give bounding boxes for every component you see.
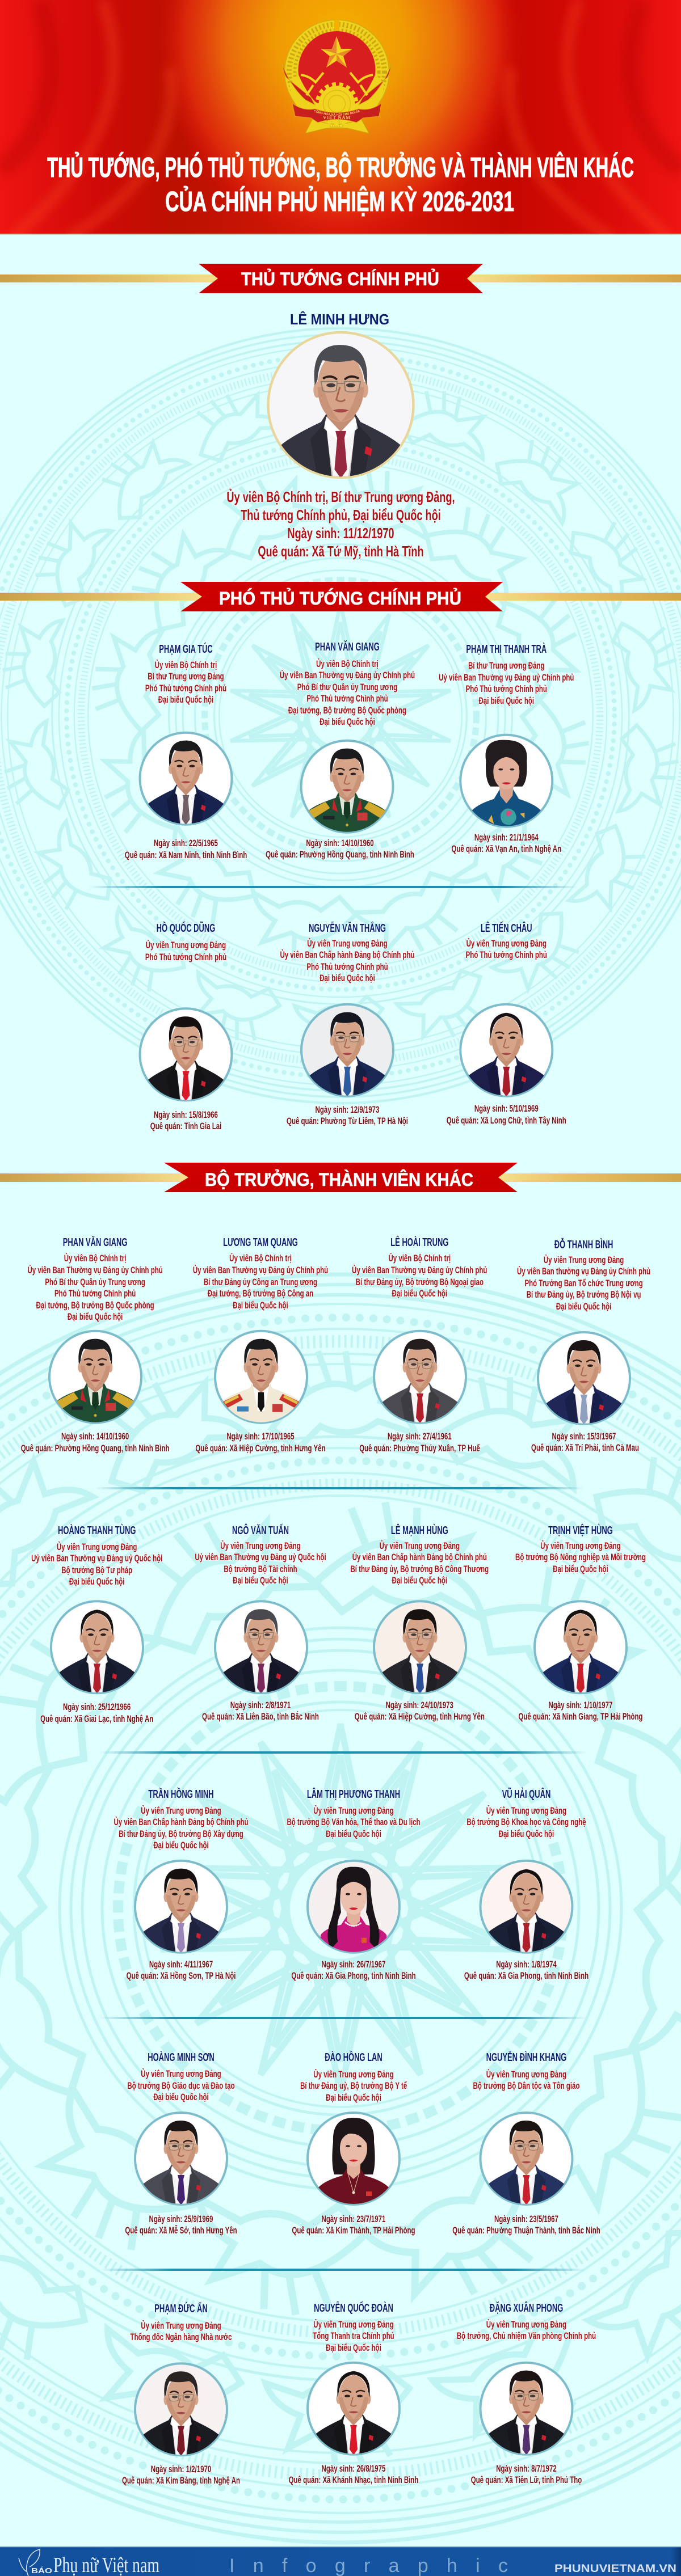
panel: Lê Mạnh Hùng	[350, 1524, 489, 1722]
role and biography: Ngày sinh: 11/12/1970	[287, 525, 394, 542]
birth date and hometown: Quê quán: Phường Thuận Thành, tỉnh Bắc Ninh	[452, 2224, 600, 2236]
roles: Bộ trưởng Bộ Dân tộc và Tôn giáo	[473, 2081, 580, 2092]
portrait	[538, 1332, 630, 1426]
birth date and hometown: Quê quán: Phường Thủy Xuân, TP Huế	[359, 1443, 480, 1454]
birth date and hometown: Ngày sinh: 17/10/1965	[226, 1431, 295, 1442]
birth date and hometown: Quê quán: Xã Mễ Sở, tỉnh Hưng Yên	[125, 2225, 237, 2236]
roles: Ủy viên Trung ương Đảng	[486, 1805, 566, 1817]
birth date and hometown: Ngày sinh: 23/5/1967	[494, 2214, 558, 2225]
roles: Đại biểu Quốc hội	[158, 695, 213, 706]
birth date and hometown	[359, 1431, 480, 1454]
roles: Đại biểu Quốc hội	[69, 1577, 124, 1587]
roles: Ủy viên Trung ương Đảng	[486, 2068, 566, 2080]
roles	[300, 2068, 407, 2104]
birth date and hometown: Ngày sinh: 2/8/1971	[230, 1700, 291, 1711]
roles: Bí thư Trung ương Đảng	[468, 661, 544, 672]
panel: Phan Văn Giang (Bộ Quốc phòng)	[21, 1236, 170, 1454]
panel: Đào Hồng Lan	[292, 2051, 415, 2236]
birth date and hometown: Quê quán: Phường Hồng Quang, tỉnh Ninh Bình	[266, 850, 414, 860]
roles: Bí thư Đảng uỷ, Bộ trưởng Bộ Y tế	[300, 2081, 407, 2092]
roles: Ủy viên Bộ Chính trị	[316, 658, 379, 670]
roles: Ủy viên Bộ Chính trị	[229, 1252, 292, 1264]
roles	[466, 1805, 586, 1840]
birth date and hometown	[292, 2214, 415, 2236]
roles: Bộ trưởng Bộ Khoa học và Công nghệ	[466, 1817, 586, 1828]
panel: Nguyễn Quốc Đoàn	[289, 2301, 418, 2486]
roles: Phó Thủ tướng Chính phủ	[466, 950, 547, 961]
name: ĐẶNG XUÂN PHONG	[490, 2301, 563, 2315]
birth date and hometown	[464, 1960, 588, 1982]
portrait	[308, 2113, 400, 2207]
logo text: BÁO	[31, 2566, 52, 2575]
roles: Đại biểu Quốc hội	[392, 1289, 447, 1299]
roles: Đại tướng, Bộ trưởng Bộ Quốc phòng	[288, 706, 406, 716]
roles: Bí thư Đảng ủy, Bộ trưởng Bộ Nội vụ	[527, 1290, 641, 1300]
roles: Đại biểu Quốc hội	[499, 1829, 554, 1840]
birth date and hometown	[518, 1700, 643, 1722]
roles	[114, 1805, 249, 1851]
birth date and hometown: Ngày sinh: 27/4/1961	[388, 1431, 452, 1442]
birth date and hometown: Ngày sinh: 14/10/1960	[306, 838, 374, 849]
roles: Đại biểu Quốc hội	[553, 1564, 608, 1575]
roles: Bộ trưởng Bộ Tài chính	[224, 1564, 297, 1575]
birth date and hometown: Quê quán: Phường Từ Liêm, TP Hà Nội	[287, 1116, 408, 1127]
roles: Đại biểu Quốc hội	[233, 1300, 288, 1311]
portrait	[460, 1004, 552, 1099]
birth date and hometown	[291, 1960, 416, 1982]
roles: Ủy viên Trung ương Đảng	[486, 2319, 566, 2330]
roles: Phó Thủ tướng Chính phủ	[466, 684, 547, 695]
logo text	[31, 2553, 159, 2576]
panel: Nguyễn Văn Thắng	[280, 922, 415, 1127]
roles: Đại biểu Quốc hội	[326, 2343, 381, 2354]
roles: Ủy viên Ban Thường vụ Đảng ủy Chính phủ	[352, 1264, 487, 1276]
infographic label: Infographic	[229, 2555, 508, 2576]
panel: Lê Tiến Châu	[447, 922, 566, 1126]
portrait	[480, 2363, 572, 2457]
roles	[350, 1540, 489, 1586]
roles	[439, 661, 574, 707]
roles: Ủy viên Ban thường vụ Đảng ủy Chính phủ	[517, 1265, 650, 1277]
portrait	[301, 1004, 393, 1099]
portrait	[51, 1601, 143, 1695]
name: PHẠM GIA TÚC	[159, 643, 213, 656]
title: CỦA CHÍNH PHỦ NHIỆM KỲ 2026-2031	[165, 186, 514, 217]
title	[47, 152, 634, 217]
panel: Đỗ Thanh Bình	[517, 1238, 650, 1454]
roles	[352, 1252, 487, 1299]
roles	[280, 938, 415, 984]
roles	[131, 2320, 232, 2343]
roles: Ủy viên Trung ương Đảng	[313, 2319, 394, 2330]
roles: Đại biểu Quốc hội	[479, 696, 534, 707]
roles: Bí thư Đảng ủy, Bộ trưởng Bộ Xây dựng	[119, 1829, 243, 1840]
name: LƯƠNG TAM QUANG	[223, 1236, 298, 1249]
panel: Trịnh Việt Hùng	[515, 1524, 646, 1722]
name: LÊ TIẾN CHÂU	[481, 922, 532, 935]
roles	[515, 1540, 646, 1575]
name: PHẠM THỊ THANH TRÀ	[466, 643, 547, 656]
roles: Đại biểu Quốc hội	[320, 973, 375, 984]
roles: Ủy viên Trung ương Đảng	[141, 2068, 221, 2080]
roles	[466, 938, 547, 961]
portrait	[374, 1601, 466, 1695]
panel: Trần Hồng Minh	[114, 1788, 249, 1982]
birth date and hometown	[122, 2464, 240, 2486]
roles	[31, 1541, 162, 1587]
roles: Ủy viên Trung ương Đảng	[466, 938, 547, 949]
panel: Phan Văn Giang	[266, 640, 415, 860]
birth date and hometown: Ngày sinh: 15/8/1966	[154, 1110, 218, 1121]
portrait	[215, 1331, 307, 1425]
icon: national emblem of Vietnam: VIỆT NAM	[323, 115, 351, 120]
roles: Bí thư Đảng ủy Công an Trung ương	[204, 1277, 317, 1288]
roles	[145, 659, 226, 706]
name: ĐÀO HỒNG LAN	[325, 2051, 382, 2064]
role and biography	[226, 489, 455, 560]
roles: Đại biểu Quốc hội	[153, 1840, 209, 1851]
section heading: Thủ tướng Chính phủ	[0, 264, 681, 293]
birth date and hometown: Quê quán: Xã Trí Phải, tỉnh Cà Mau	[531, 1443, 639, 1454]
name: HỒ QUỐC DŨNG	[157, 921, 215, 935]
portrait	[374, 1331, 466, 1425]
roles: Đại biểu Quốc hội	[326, 2093, 381, 2104]
section heading: Phó Thủ tướng Chính phủ: PHÓ THỦ TƯỚNG CHÍNH PHỦ	[219, 588, 461, 609]
birth date and hometown: Ngày sinh: 1/2/1970	[151, 2464, 211, 2475]
icon: national emblem of Vietnam	[281, 19, 392, 134]
roles: Bí thư Đảng ủy, Bộ trưởng Bộ Công Thương	[350, 1564, 489, 1575]
birth date and hometown: Ngày sinh: 25/12/1966	[63, 1702, 131, 1713]
birth date and hometown	[266, 838, 414, 860]
roles: Ủy viên Trung ương Đảng	[307, 938, 388, 949]
birth date and hometown	[125, 838, 247, 861]
name: PHAN VĂN GIANG	[315, 640, 380, 653]
roles: Đại biểu Quốc hội	[556, 1302, 611, 1312]
portrait	[268, 332, 413, 481]
birth date and hometown	[452, 833, 561, 855]
birth date and hometown: Quê quán: Xã Nam Ninh, tỉnh Ninh Bình	[125, 850, 247, 861]
name: ĐỖ THANH BÌNH	[554, 1238, 613, 1251]
panel: Lê Minh Hưng	[226, 311, 455, 560]
roles: Ủy viên Trung ương Đảng	[220, 1540, 301, 1552]
name: VŨ HẢI QUÂN	[502, 1787, 550, 1801]
roles: Phó Bí thư Quân ủy Trung ương	[45, 1277, 145, 1288]
roles	[127, 2068, 235, 2103]
roles: Bí thư Trung ương Đảng	[148, 672, 224, 682]
birth date and hometown: Quê quán: Xã Tiên Lữ, tỉnh Phú Thọ	[471, 2475, 582, 2486]
roles: Phó Thủ tướng Chính phủ	[145, 683, 226, 694]
birth date and hometown: Ngày sinh: 26/8/1975	[322, 2464, 385, 2474]
roles	[517, 1254, 650, 1312]
panel: Ngô Văn Tuấn	[195, 1524, 326, 1722]
roles: Ủy viên Trung ương Đảng	[544, 1254, 624, 1266]
birth date and hometown	[287, 1105, 408, 1127]
birth date and hometown	[452, 2214, 600, 2236]
roles	[145, 939, 226, 963]
birth date and hometown: Quê quán: Xã Gia Phong, tỉnh Ninh Bình	[291, 1971, 416, 1982]
roles: Phó Thủ tướng Chính phủ	[306, 962, 388, 973]
birth date and hometown: Ngày sinh: 15/3/1967	[552, 1431, 616, 1442]
birth date and hometown	[289, 2464, 418, 2486]
portrait	[140, 733, 232, 827]
name: PHẠM ĐỨC ẤN	[154, 2302, 208, 2315]
birth date and hometown: Ngày sinh: 8/7/1972	[496, 2464, 557, 2474]
panel: Vũ Hải Quân	[464, 1787, 588, 1982]
panel: Đặng Xuân Phong	[457, 2301, 596, 2486]
birth date and hometown: Ngày sinh: 21/1/1964	[474, 833, 539, 843]
birth date and hometown	[531, 1431, 639, 1454]
birth date and hometown: Quê quán: Xã Hồng Sơn, TP Hà Nội	[127, 1971, 236, 1982]
roles	[195, 1540, 326, 1586]
roles: Đại biểu Quốc hội	[68, 1312, 123, 1323]
name: HOÀNG THANH TÙNG	[58, 1524, 136, 1537]
name: LÊ MẠNH HÙNG	[391, 1524, 448, 1537]
roles: Phó Thủ tướng Chính phủ	[306, 694, 388, 704]
header banner	[0, 0, 681, 235]
roles: Ủy viên Ban Thường vụ Đảng ủy Chính phủ	[193, 1264, 328, 1276]
roles: Uỷ viên Ban Thường vụ Đảng uỷ Chính phủ	[439, 673, 574, 683]
birth date and hometown: Ngày sinh: 1/8/1974	[496, 1960, 557, 1970]
birth date and hometown: Quê quán: Xã Gia Phong, tỉnh Ninh Bình	[464, 1971, 588, 1982]
panel: Hoàng Thanh Tùng	[31, 1524, 162, 1725]
birth date and hometown	[127, 1960, 236, 1982]
birth date and hometown	[150, 1110, 221, 1132]
birth date and hometown: Quê quán: Tỉnh Gia Lai	[150, 1121, 221, 1132]
birth date and hometown: Quê quán: Xã Hiệp Cường, tỉnh Hưng Yên	[195, 1443, 326, 1454]
portrait	[215, 1601, 307, 1695]
footer	[0, 2547, 681, 2576]
birth date and hometown: Ngày sinh: 26/7/1967	[322, 1960, 385, 1970]
background drum pattern: upper	[0, 328, 681, 1103]
birth date and hometown: Quê quán: Xã Ninh Giang, TP Hải Phòng	[518, 1712, 643, 1722]
birth date and hometown: Ngày sinh: 4/11/1967	[149, 1960, 213, 1970]
roles: Đại tướng, Bộ trưởng Bộ Quốc phòng	[36, 1300, 154, 1311]
roles: Bộ trưởng, Chủ nhiệm Văn phòng Chính phủ	[457, 2331, 596, 2342]
birth date and hometown: Quê quán: Xã Liên Bão, tỉnh Bắc Ninh	[202, 1711, 319, 1722]
birth date and hometown: Quê quán: Xã Vạn An, tỉnh Nghệ An	[452, 844, 561, 855]
birth date and hometown: Quê quán: Xã Hiệp Cường, tỉnh Hưng Yên	[355, 1712, 485, 1722]
roles: Ủy viên Bộ Chính trị	[155, 659, 217, 671]
portrait	[135, 2113, 227, 2207]
roles: Đại biểu Quốc hội	[392, 1576, 447, 1586]
section heading: Thủ tướng Chính phủ: THỦ TƯỚNG CHÍNH PHỦ	[241, 269, 439, 289]
birth date and hometown: Quê quán: Phường Hồng Quang, tỉnh Ninh Bình	[21, 1443, 170, 1454]
portrait	[308, 1861, 400, 1955]
roles: Uỷ viên Ban Thường vụ Đảng uỷ Quốc hội	[195, 1552, 326, 1563]
roles: Ủy viên Trung ương Đảng	[146, 939, 226, 951]
roles: Đại biểu Quốc hội	[320, 717, 375, 728]
roles	[287, 1805, 421, 1840]
name: NGUYỄN ĐÌNH KHANG	[486, 2051, 566, 2064]
section heading: Phó Thủ tướng Chính phủ	[0, 582, 681, 611]
roles: Tổng Thanh tra Chính phủ	[313, 2331, 394, 2342]
panel: Hồ Quốc Dũng	[140, 921, 232, 1132]
roles: Phó Thủ tướng Chính phủ	[54, 1289, 136, 1299]
roles: Ủy viên Ban Chấp hành Đảng bộ Chính phủ	[114, 1816, 249, 1828]
panel: Phạm Thị Thanh Trà	[439, 643, 574, 855]
roles: Ủy viên Ban Chấp hành Đảng bộ Chính phủ	[352, 1551, 487, 1563]
roles	[313, 2319, 394, 2354]
birth date and hometown: Ngày sinh: 22/5/1965	[154, 838, 218, 849]
name: NGUYỄN QUỐC ĐOÀN	[314, 2301, 393, 2315]
roles: Bộ trưởng Bộ Giáo dục và Đào tạo	[127, 2081, 235, 2092]
roles: Thống đốc Ngân hàng Nhà nước	[131, 2332, 232, 2343]
roles: Ủy viên Trung ương Đảng	[57, 1541, 137, 1553]
birth date and hometown	[355, 1700, 485, 1722]
roles: Bộ trưởng Bộ Tư pháp	[61, 1565, 132, 1576]
website: PHUNUVIETNAM.VN	[554, 2563, 676, 2575]
roles: Ủy viên Ban Chấp hành Đảng bộ Chính phủ	[280, 949, 415, 961]
section heading: Bộ trưởng, thành viên khác	[0, 1163, 681, 1192]
birth date and hometown: Ngày sinh: 5/10/1969	[474, 1104, 539, 1114]
roles: Ủy viên Bộ Chính trị	[64, 1252, 126, 1264]
portrait	[135, 2363, 227, 2457]
portrait	[49, 1331, 141, 1425]
roles: Ủy viên Bộ Chính trị	[388, 1252, 451, 1264]
roles	[457, 2319, 596, 2342]
roles	[473, 2068, 580, 2092]
portrait	[308, 2363, 400, 2457]
role and biography: Ủy viên Bộ Chính trị, Bí thư Trung ương Đảng,	[226, 489, 455, 505]
birth date and hometown: Ngày sinh: 23/7/1971	[322, 2214, 385, 2225]
name: NGÔ VĂN TUẤN	[232, 1524, 289, 1537]
roles: Ủy viên Trung ương Đảng	[380, 1540, 460, 1552]
roles: Ủy viên Trung ương Đảng	[540, 1540, 621, 1552]
roles: Đại tướng, Bộ trưởng Bộ Công an	[208, 1289, 313, 1299]
birth date and hometown: Quê quán: Xã Khánh Nhạc, tỉnh Ninh Bình	[289, 2475, 418, 2486]
roles: Ủy viên Trung ương Đảng	[141, 1805, 221, 1817]
portrait	[135, 1861, 227, 1955]
birth date and hometown: Ngày sinh: 12/9/1973	[316, 1105, 379, 1116]
roles: Phó Bí thư Quân ủy Trung ương	[297, 682, 397, 693]
birth date and hometown: Ngày sinh: 24/10/1973	[386, 1700, 453, 1711]
birth date and hometown: Ngày sinh: 25/9/1969	[149, 2214, 213, 2225]
panel: Nguyễn Đình Khang	[452, 2051, 600, 2236]
portrait	[301, 741, 393, 835]
roles: Ủy viên Trung ương Đảng	[313, 2068, 394, 2080]
roles: Đại biểu Quốc hội	[233, 1576, 288, 1586]
panel: Lê Hoài Trung	[352, 1236, 487, 1454]
name: TRẦN HỒNG MINH	[148, 1788, 214, 1801]
roles: Bộ trưởng Bộ Văn hóa, Thể thao và Du lịch	[287, 1817, 421, 1828]
name: NGUYỄN VĂN THẮNG	[309, 922, 386, 935]
birth date and hometown: Ngày sinh: 1/10/1977	[549, 1700, 612, 1711]
roles	[280, 658, 415, 728]
name: LÂM THỊ PHƯƠNG THANH	[307, 1788, 400, 1801]
birth date and hometown: Quê quán: Xã Kim Bảng, tỉnh Nghệ An	[122, 2476, 240, 2486]
icon: national emblem of Vietnam: CỘNG HÒA XÃ HỘI CHỦ NGHĨA	[314, 110, 360, 116]
role and biography: Quê quán: Xã Tứ Mỹ, tỉnh Hà Tĩnh	[258, 543, 424, 560]
portrait	[480, 1861, 572, 1955]
roles	[27, 1252, 163, 1323]
roles: Đại biểu Quốc hội	[153, 2092, 209, 2103]
name: LÊ MINH HƯNG	[290, 311, 389, 328]
roles: Bộ trưởng Bộ Nông nghiệp và Môi trường	[515, 1552, 646, 1563]
birth date and hometown: Quê quán: Xã Giai Lạc, tỉnh Nghệ An	[40, 1714, 153, 1725]
roles: Ủy viên Trung ương Đảng	[141, 2320, 221, 2332]
birth date and hometown	[195, 1431, 326, 1454]
birth date and hometown	[21, 1431, 170, 1454]
birth date and hometown: Quê quán: Xã Kim Thành, TP Hải Phòng	[292, 2226, 415, 2236]
portrait	[140, 1008, 232, 1103]
portrait	[480, 2113, 572, 2207]
icon: newspaper logo flower	[19, 2549, 40, 2576]
birth date and hometown	[447, 1104, 566, 1126]
birth date and hometown	[471, 2464, 582, 2486]
birth date and hometown: Quê quán: Xã Long Chữ, tỉnh Tây Ninh	[447, 1116, 566, 1126]
panel: Phạm Đức Ấn	[122, 2302, 240, 2486]
roles: Đại biểu Quốc hội	[326, 1829, 381, 1840]
panel: Lương Tam Quang	[193, 1236, 328, 1454]
portrait	[535, 1601, 627, 1695]
panel: Phạm Gia Túc	[125, 643, 247, 861]
roles: Phó Thủ tướng Chính phủ	[145, 952, 226, 963]
roles: Ủy viên Trung ương Đảng	[313, 1805, 394, 1817]
name: PHAN VĂN GIANG	[63, 1236, 127, 1249]
name: HOÀNG MINH SƠN	[148, 2051, 215, 2064]
name: TRỊNH VIỆT HÙNG	[548, 1524, 613, 1537]
roles: Bí thư Đảng ủy, Bộ trưởng Bộ Ngoại giao	[356, 1277, 484, 1288]
roles	[193, 1252, 328, 1311]
role and biography: Thủ tướng Chính phủ, Đại biểu Quốc hội	[241, 507, 441, 523]
birth date and hometown	[125, 2214, 237, 2236]
section heading: Bộ trưởng, thành viên khác: BỘ TRƯỞNG, THÀNH VIÊN KHÁC	[205, 1169, 473, 1190]
birth date and hometown: Ngày sinh: 14/10/1960	[61, 1431, 129, 1442]
roles: Ủy viên Ban Thường vụ Đảng ủy Chính phủ	[280, 669, 415, 681]
panel: Lâm Thị Phương Thanh	[287, 1788, 421, 1982]
portrait	[460, 735, 552, 829]
panel: Hoàng Minh Sơn	[125, 2051, 237, 2236]
roles: Ủy viên Ban Thường vụ Đảng ủy Chính phủ	[27, 1264, 163, 1276]
birth date and hometown	[40, 1702, 153, 1725]
roles: Phó Trưởng Ban Tổ chức Trung ương	[524, 1278, 643, 1289]
roles: Uỷ viên Ban Thường vụ Đảng uỷ Quốc hội	[31, 1553, 162, 1564]
name: LÊ HOÀI TRUNG	[390, 1236, 448, 1249]
birth date and hometown	[202, 1700, 319, 1722]
background drum pattern: lower	[0, 1274, 681, 2543]
